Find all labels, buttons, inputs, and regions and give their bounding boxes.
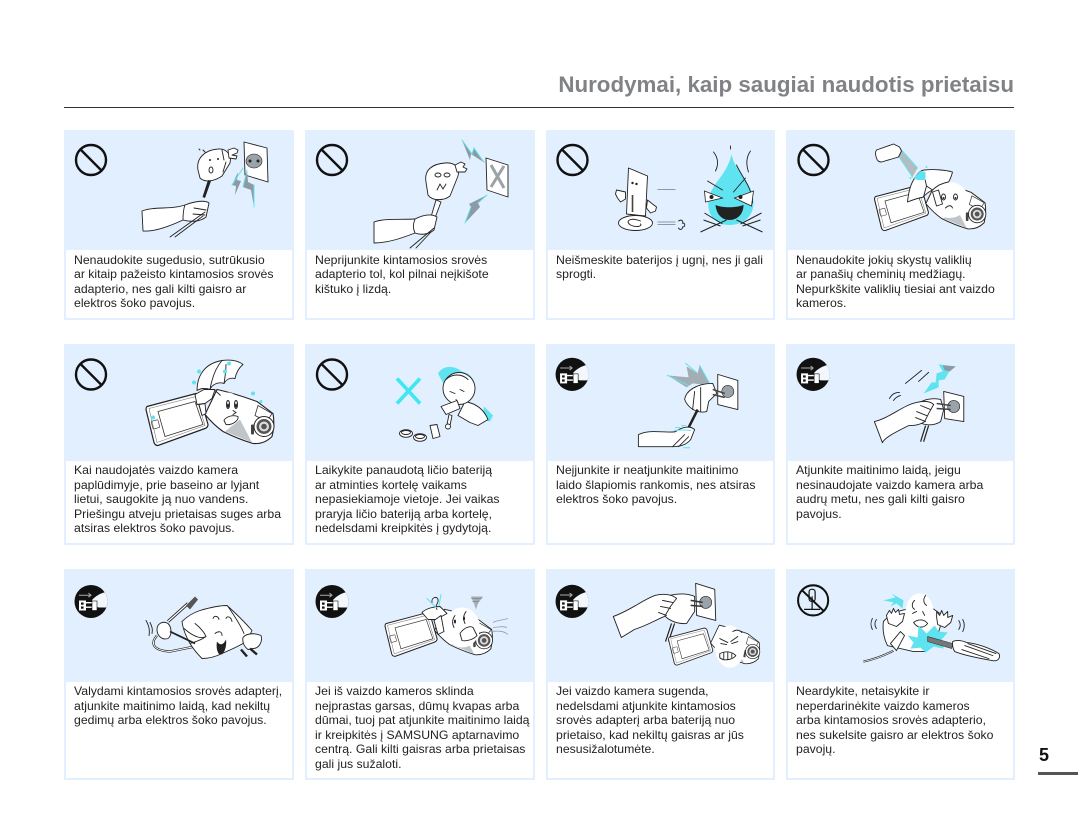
panel: do not disassemble: Neardykite, netaisykite ir [796,684,929,698]
panel: storm unplug: Atjunkite maitinimo laidą, jeigu [796,463,961,477]
panel: cleaning solvents: kameros. [796,296,846,310]
title: Nurodymai, kaip saugiai naudotis prietaisu [558,72,1014,97]
panel: adapter fully inserted: kištuko į lizdą. [315,282,391,296]
text block [548,461,773,543]
panel: faulty camera: srovės adapterį arba bateriją nuo [556,713,735,727]
text block [788,250,1013,318]
illustration: unplugging and camera [556,582,760,668]
illustration: spray can and camera with umbrella [797,144,986,232]
panel: cleaning solvents: ar panašių cheminių medžiagų. [796,267,966,281]
text block [788,461,1013,543]
panel: do not disassemble: pavojų. [796,742,836,756]
illustration: damaged adapter and no-use icon [74,142,268,238]
text block [307,250,533,318]
panel: do not disassemble: arba kintamosios srovės adapterio, [796,713,986,727]
illustration: camera under umbrella [74,358,274,446]
illustration: screwdriver and adapter [797,584,1000,663]
text block [548,250,773,318]
panel: damaged adapter [64,130,294,320]
panel: cleaning solvents: Nepurkškite valiklių tiesiai ant vaizdo [796,282,995,296]
illustration: hand unplugging in a storm [796,358,964,444]
panel: faulty camera: nesusižalotumėte. [556,742,655,756]
panel: water protection: Priešingu atveju prietaisas suges arba [74,507,281,521]
panel: lithium battery and children: praryja ličio bateriją arba kortelę, [315,507,492,521]
panel: abnormal camera: ir kreipkitės į SAMSUNG aptarnavimo [315,728,519,742]
panel: faulty camera: prietaiso, kad nekiltų gaisras ar jūs [556,728,744,742]
panel: do not disassemble: neperdarinėkite vaizdo kameros [796,699,970,713]
panel: battery in fire: Neišmeskite baterijos į ugnį, nes ji gali [556,252,763,266]
panel: cleaning solvents: Nenaudokite jokių skystų valiklių [796,252,972,266]
panel: damaged adapter: ar kitaip pažeisto kintamosios srovės [74,267,274,281]
illustration: camera with smoke [316,585,508,657]
panel: do not disassemble [786,569,1015,780]
panel: lithium battery and children: nepasiekiamoje vietoje. Jei vaikas [315,492,500,506]
panel: damaged adapter: elektros šoko pavojus. [74,296,195,310]
panel: lithium battery and children: nedelsdami kreipkitės į gydytoją. [315,521,491,535]
panel: storm unplug: audrų metu, nes gali kilti gaisro [796,492,965,506]
illustration: baby, battery coins and cross [316,358,493,442]
panel: adapter fully inserted [305,130,535,320]
panel: water protection: Kai naudojatės vaizdo kamera [74,463,238,477]
text block [66,682,292,778]
text block [66,250,292,318]
panel: battery in fire: sprogti. [556,267,596,281]
panel: abnormal camera: centrą. Gali kilti gaisras arba prietaisas [315,742,525,756]
panel: cleaning adapter: Valydami kintamosios srovės adapterį, [74,684,282,698]
panel: storm unplug [786,344,1015,545]
panel: faulty camera [546,569,775,780]
panel: storm unplug: pavojus. [796,507,842,521]
panel: water protection: atsiras elektros šoko pavojus. [74,521,235,535]
panel: water protection [64,344,294,545]
panel: cleaning solvents [786,130,1015,320]
panel: damaged adapter: adapterio, nes gali kilti gaisro ar [74,282,246,296]
text block [307,461,533,543]
text block [548,682,773,778]
panel: damaged adapter: Nenaudokite sugedusio, sutrūkusio [74,252,265,266]
text block [788,682,1013,778]
panel: abnormal camera [305,569,535,780]
panel: wet hands: laido šlapiomis rankomis, nes atsiras [556,478,755,492]
page number [1038,745,1078,775]
panel: water protection: lietui, saugokite ją nuo vandens. [74,492,248,506]
panel: faulty camera: nedelsdami atjunkite kintamosios [556,699,736,713]
page number: 5 [1039,745,1049,765]
panel: lithium battery and children: ar atminties kortelę vaikams [315,478,467,492]
panel: water protection: paplūdimyje, prie baseino ar lyjant [74,478,259,492]
panel: abnormal camera: Jei iš vaizdo kameros sklinda [315,684,474,698]
panel: abnormal camera: dūmai, tuoj pat atjunkite maitinimo laidą [315,713,530,727]
panel: wet hands: Neįjunkite ir neatjunkite maitinimo [556,463,738,477]
panel: wet hands [546,344,775,545]
panel: cleaning adapter [64,569,294,780]
panel: battery in fire [546,130,775,320]
illustration: wet hand on plug [556,358,738,448]
panel: lithium battery and children: Laikykite panaudotą ličio bateriją [315,463,492,477]
panel: do not disassemble: nes sukelsite gaisro ar elektros šoko [796,728,993,742]
illustration: adapter with cord [74,585,262,659]
illustration: battery and flame [556,144,763,232]
panel: faulty camera: Jei vaizdo kamera sugenda, [556,684,709,698]
text block [66,461,292,543]
panel: wet hands: elektros šoko pavojus. [556,492,677,506]
panel: abnormal camera: neįprastas garsas, dūmų kvapas arba [315,699,519,713]
illustration: adapter and socket with sparks [316,140,508,248]
panel: adapter fully inserted: adapterio tol, kol pilnai neįkišote [315,267,489,281]
panel: cleaning adapter: gedimų arba elektros šoko pavojus. [74,713,267,727]
panel: storm unplug: nesinaudojate vaizdo kamera arba [796,478,983,492]
text block [307,682,533,778]
panel: lithium battery and children [305,344,535,545]
panel: cleaning adapter: atjunkite maitinimo laidą, kad nekiltų [74,699,270,713]
panel: adapter fully inserted: Neprijunkite kintamosios srovės [315,252,487,266]
panel: abnormal camera: gali jus sužaloti. [315,757,401,771]
